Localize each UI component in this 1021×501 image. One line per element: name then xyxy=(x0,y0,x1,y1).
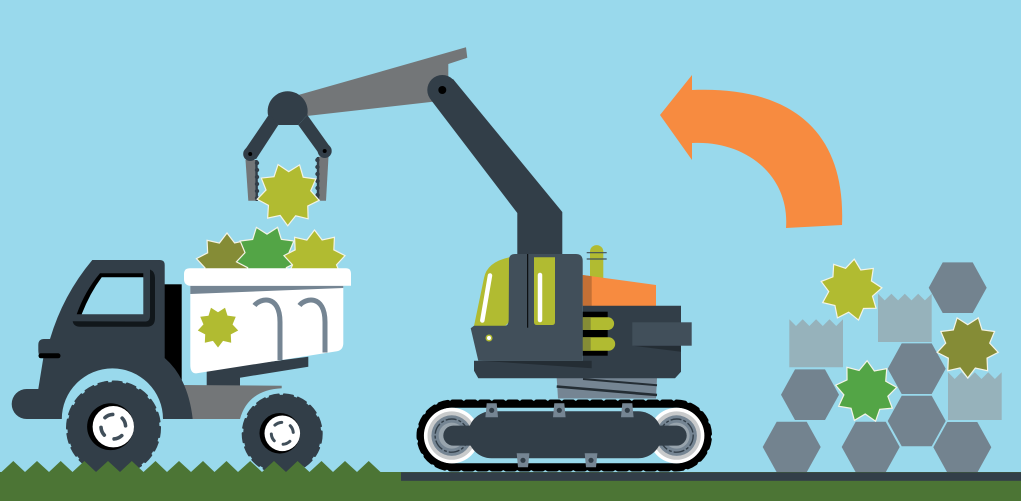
grass ground xyxy=(0,461,1021,501)
excavator arm xyxy=(427,75,562,262)
truck bed xyxy=(184,268,351,373)
grabber claw xyxy=(243,91,332,231)
shadow under cab xyxy=(480,361,592,368)
grabber boom xyxy=(298,47,467,116)
torn boxes xyxy=(789,294,1002,420)
front wheel xyxy=(67,382,160,474)
truck cab xyxy=(12,260,193,419)
dump truck xyxy=(12,221,351,474)
rubble pile xyxy=(763,257,1004,473)
hydraulic pistons xyxy=(583,312,615,356)
dark ground strip xyxy=(401,472,1021,481)
orange engine cover xyxy=(583,275,656,306)
cab body xyxy=(471,254,583,361)
cab door window xyxy=(534,257,555,325)
track brackets xyxy=(485,403,634,467)
load of material in truck bed xyxy=(193,221,350,299)
swivel joint xyxy=(557,378,657,398)
claw teeth xyxy=(256,157,318,201)
exhaust pipe xyxy=(587,245,607,280)
track frame xyxy=(443,411,687,458)
cab window xyxy=(73,270,155,327)
hexagon blocks xyxy=(763,262,991,473)
excavator xyxy=(419,75,710,469)
glass highlight xyxy=(482,276,490,320)
door line xyxy=(527,254,529,328)
claw fingers xyxy=(246,160,257,201)
crawler track xyxy=(419,402,710,469)
rear counterweight xyxy=(632,322,692,352)
left track wheel xyxy=(424,408,480,463)
star material pieces xyxy=(820,257,1004,426)
bed hydraulic support xyxy=(207,357,308,386)
orange curved arrow xyxy=(660,75,842,228)
rear wheel xyxy=(243,394,322,473)
excavator headlight xyxy=(486,334,492,342)
right track wheel xyxy=(649,408,704,463)
cab glass xyxy=(474,257,509,326)
black cab back xyxy=(164,284,182,385)
headlight line xyxy=(38,353,60,358)
truck chassis xyxy=(182,385,282,419)
material held in claw xyxy=(253,158,325,231)
claw arms and hub xyxy=(243,91,332,161)
lower body xyxy=(474,306,681,378)
